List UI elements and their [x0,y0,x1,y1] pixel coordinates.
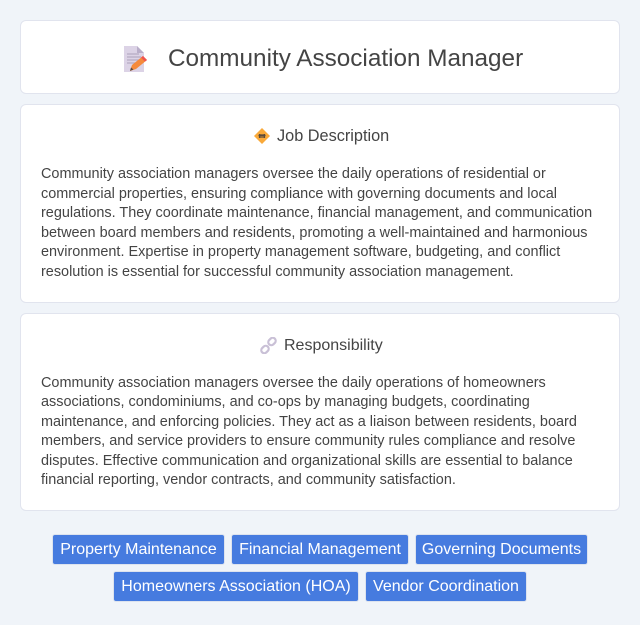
icon: job description diamond [254,128,270,144]
text: responsibility: associations, condominiums, and co-ops by managing budgets, coordinating [41,394,530,410]
tag: governing documents [416,535,587,564]
tag: financial management: Financial Management [239,541,401,558]
text: job description: environment. Expertise in property management software, budgeting, and conflict [41,244,560,260]
text: job description: commercial properties, ensuring compliance with governing documents and local [41,186,557,202]
text: responsibility [41,375,577,488]
panel: job description [20,104,620,303]
text: job description [41,166,592,280]
panel: responsibility [20,313,620,511]
text: job description: Community association managers oversee the daily operations of residential or [41,166,546,182]
tag: property maintenance: Property Maintenance [60,541,217,558]
tag: financial management [232,535,408,564]
icon: document with pencil [124,46,147,72]
text: job description: between board members and residents, promoting a well-maintained and harmonious [41,225,588,241]
tag: homeowners association [114,572,358,601]
text: responsibility: disputes. Effective communication and organizational skills are essential to balance [41,453,573,469]
title: Community Association Manager [168,45,523,72]
text: job description: resolution is essential for successful community association management. [41,264,514,280]
text: responsibility: financial reporting, vendor contracts, and community satisfaction. [41,472,456,488]
text: job description: regulations. They coordinate maintenance, financial management, and communication [41,205,592,221]
text: responsibility: maintenance, and enforcing policies. They act as a liaison between residents, board [41,414,577,430]
text: responsibility: members, and service providers to ensure community rules compliance and resolve [41,433,575,449]
tag: homeowners association: Homeowners Association (HOA) [121,578,351,595]
tag: governing documents: Governing Documents [422,541,581,558]
heading: responsibility: Responsibility [284,337,383,354]
tag: vendor coordination: Vendor Coordination [373,578,519,595]
panel: title card [20,20,620,94]
text: responsibility: Community association managers oversee the daily operations of homeowners [41,375,546,391]
heading: job description: Job Description [277,127,389,145]
tag: property maintenance [53,535,224,564]
icon: chain link [260,337,277,354]
tag: vendor coordination [366,572,526,601]
